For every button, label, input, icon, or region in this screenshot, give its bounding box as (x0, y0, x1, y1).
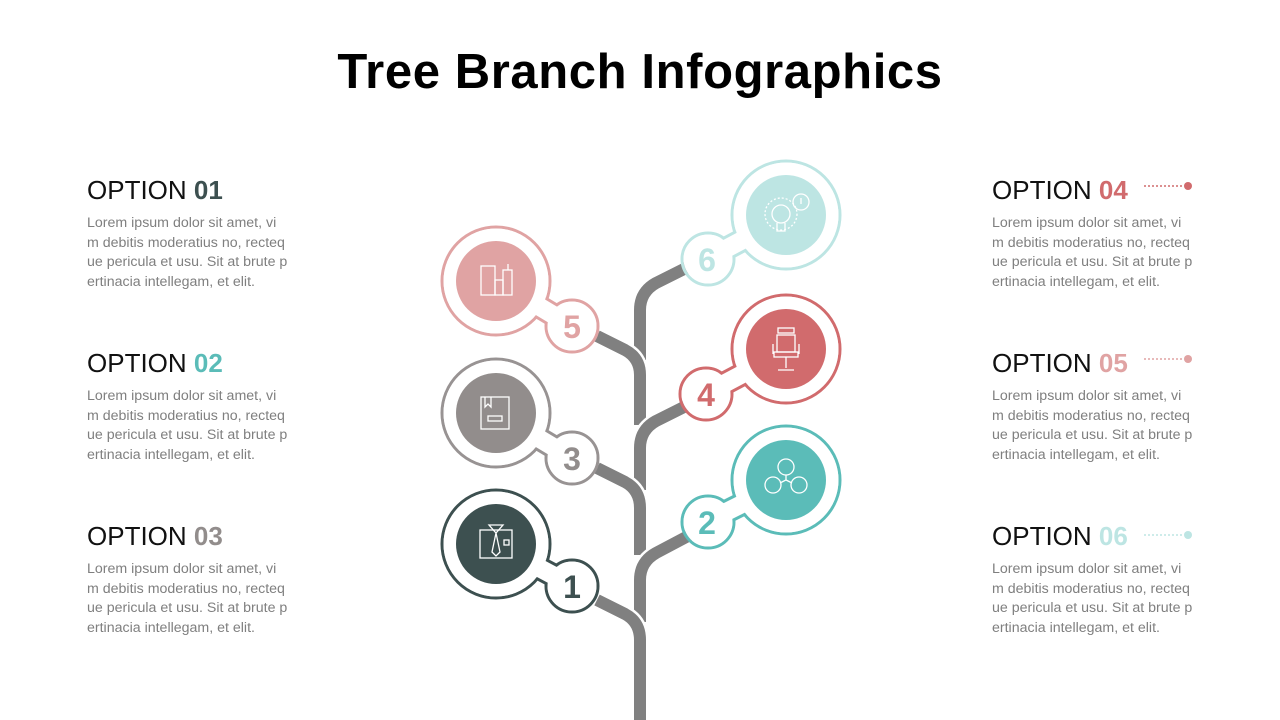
option 05 text: OPTION 05 (992, 348, 1128, 378)
option 04 text: OPTION 04 (992, 175, 1128, 205)
icon: office chair (773, 328, 799, 370)
node 5 (442, 227, 598, 352)
option 01 text: ertinacia intellegam, et elit. (87, 274, 255, 290)
option 03 text: m debitis moderatius no, recteq (87, 580, 285, 596)
node 6 (682, 161, 840, 285)
node 3 (442, 359, 598, 484)
option 01 text (87, 175, 287, 290)
option 04 text: ue pericula et usu. Sit at brute p (992, 254, 1192, 270)
node 2: 2 (698, 505, 716, 541)
option 06 text (992, 521, 1192, 636)
option 05 text (992, 348, 1192, 462)
option 05 text: ertinacia intellegam, et elit. (992, 446, 1160, 462)
title: Tree Branch Infographics (337, 45, 943, 99)
option 06 text: OPTION 06 (992, 521, 1128, 551)
icon: people network (765, 459, 807, 493)
node 4 (680, 295, 840, 420)
trunk and branches (597, 266, 690, 720)
option 02 text: Lorem ipsum dolor sit amet, vi (87, 388, 276, 404)
option 04 text (992, 175, 1192, 290)
option 06 text: ue pericula et usu. Sit at brute p (992, 600, 1192, 616)
option 03 text: Lorem ipsum dolor sit amet, vi (87, 561, 276, 577)
option 03 text: ue pericula et usu. Sit at brute p (87, 600, 287, 616)
option 03 text: OPTION 03 (87, 521, 223, 551)
node 3: 3 (563, 441, 581, 477)
option 04 text: ertinacia intellegam, et elit. (992, 274, 1160, 290)
node 1 (442, 490, 598, 612)
option 03 text: ertinacia intellegam, et elit. (87, 620, 255, 636)
option 06 text: Lorem ipsum dolor sit amet, vi (992, 561, 1181, 577)
option 04 text: m debitis moderatius no, recteq (992, 234, 1190, 250)
option 01 text: ue pericula et usu. Sit at brute p (87, 254, 287, 270)
node 5: 5 (563, 309, 581, 345)
option 06 text: m debitis moderatius no, recteq (992, 580, 1190, 596)
icon: lightbulb idea (765, 194, 809, 231)
option 02 text: ertinacia intellegam, et elit. (87, 446, 255, 462)
icon: notebook (481, 397, 509, 429)
option 02 text: OPTION 02 (87, 348, 223, 378)
icon: buildings (481, 264, 512, 295)
option 05 text: ue pericula et usu. Sit at brute p (992, 427, 1192, 443)
option 02 text: ue pericula et usu. Sit at brute p (87, 427, 287, 443)
option 04 text: Lorem ipsum dolor sit amet, vi (992, 215, 1181, 231)
option 02 text: m debitis moderatius no, recteq (87, 408, 285, 424)
node 6: 6 (698, 242, 716, 278)
option 02 text (87, 348, 287, 462)
option 01 text: m debitis moderatius no, recteq (87, 234, 285, 250)
option 05 text: m debitis moderatius no, recteq (992, 408, 1190, 424)
node 1: 1 (563, 569, 581, 605)
option 03 text (87, 521, 287, 636)
option 01 text: Lorem ipsum dolor sit amet, vi (87, 215, 276, 231)
option 01 text: OPTION 01 (87, 175, 223, 205)
option 06 text: ertinacia intellegam, et elit. (992, 620, 1160, 636)
node 2 (682, 426, 840, 548)
node 4: 4 (697, 377, 715, 413)
icon: shirt and tie (480, 525, 512, 558)
option 05 text: Lorem ipsum dolor sit amet, vi (992, 388, 1181, 404)
dotted connectors right (1144, 182, 1192, 539)
